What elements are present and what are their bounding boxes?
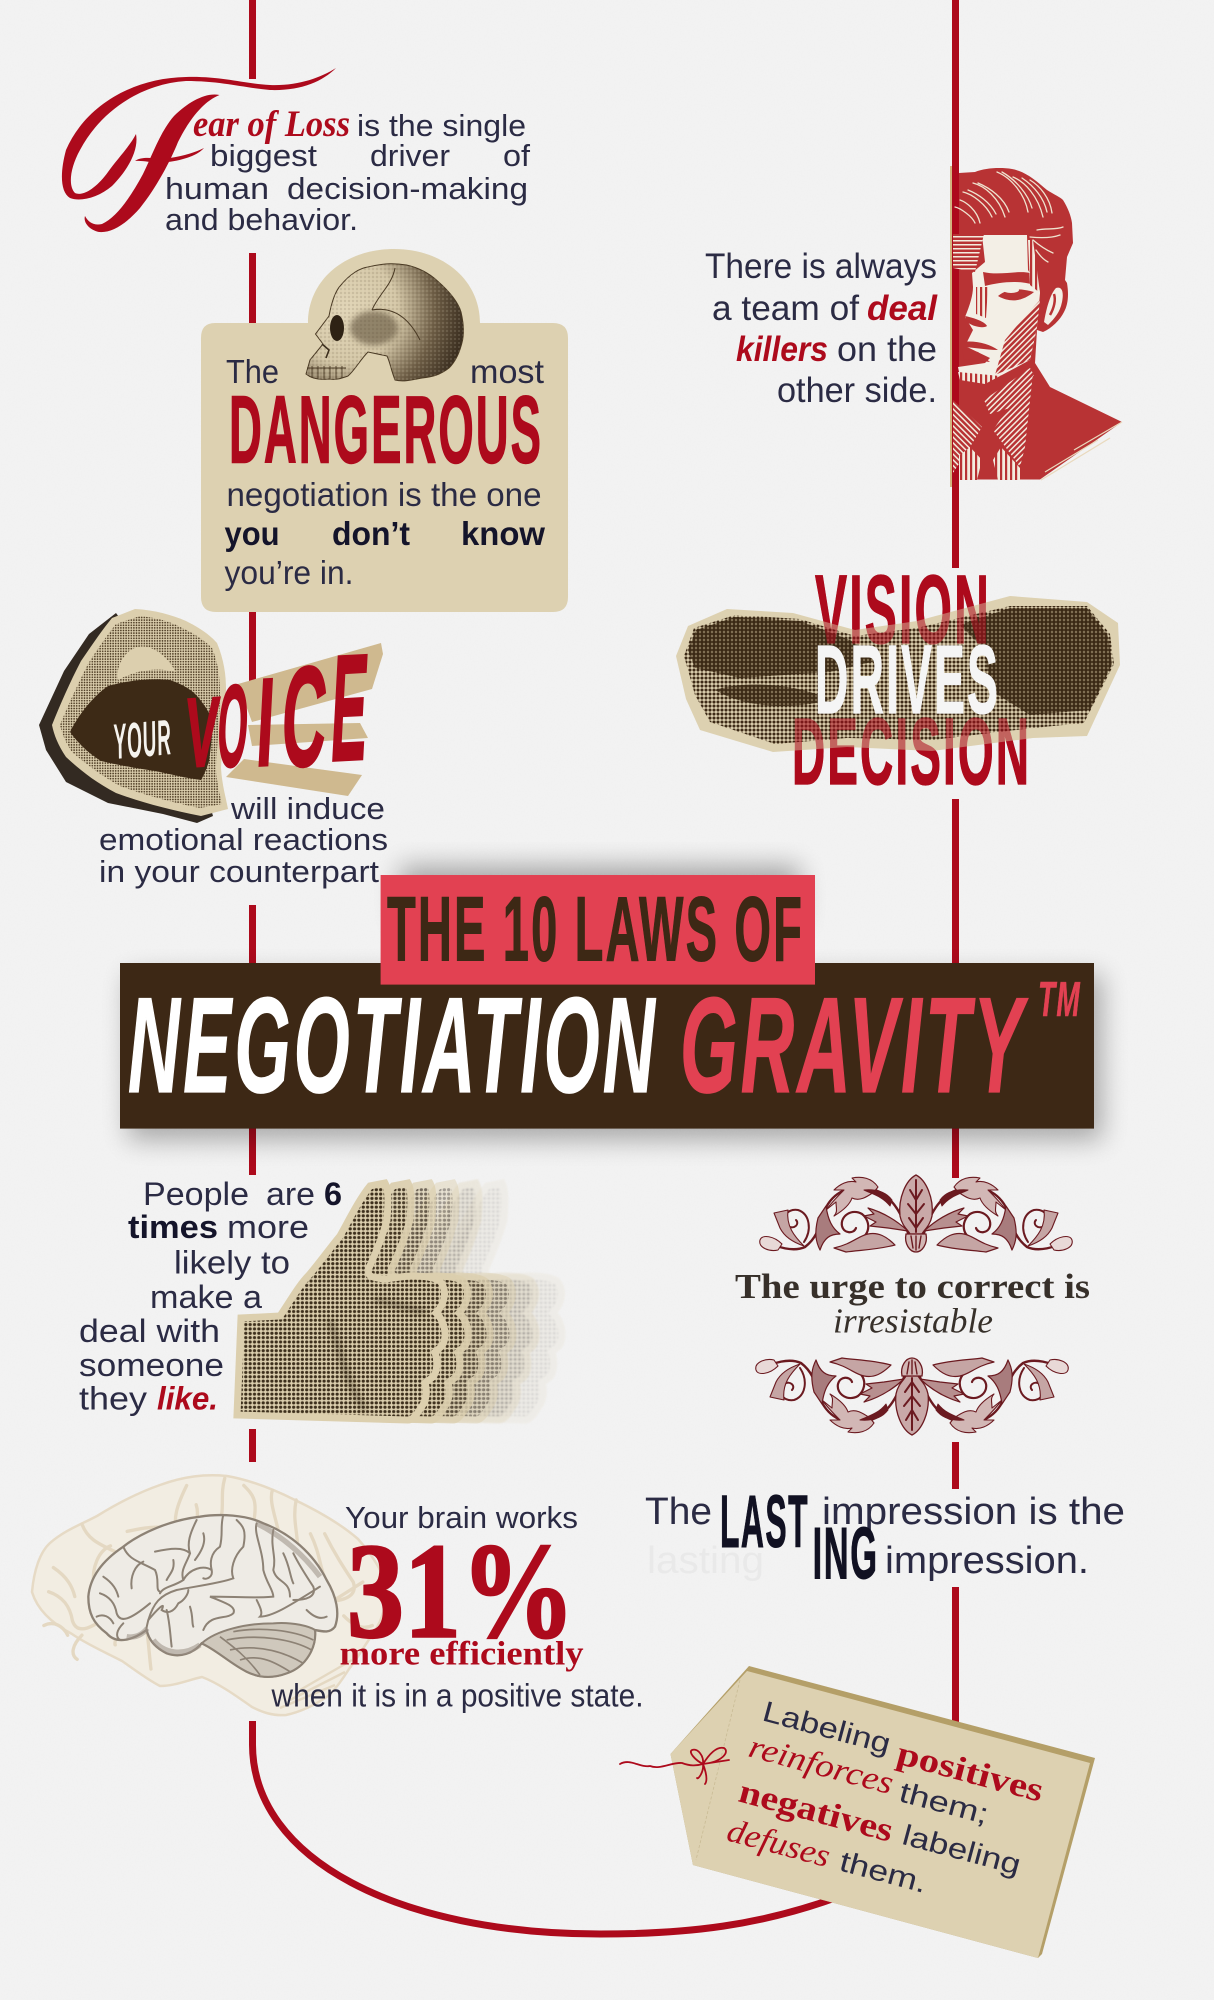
law: people like (79, 1176, 562, 1420)
law: positive brain (32, 1475, 644, 1715)
body text: is the single (357, 108, 526, 143)
ornament: top (760, 1175, 1072, 1252)
neck hatch (984, 368, 1034, 414)
body text (165, 108, 530, 237)
jacket edge lines (1041, 422, 1122, 480)
headline faded over paper: DRIVES (815, 625, 1000, 734)
text: more efficiently: more efficiently (340, 1635, 584, 1672)
banner: red panel (381, 875, 815, 985)
body text (224, 476, 545, 591)
panel: dangerous negotiation card: DANGEROUS (229, 377, 543, 484)
heading text (226, 353, 544, 484)
headline faded over paper (792, 555, 1031, 805)
law: vision drives decision (676, 555, 1120, 805)
text block: reinforces (745, 1729, 897, 1802)
body text: emotional reactions (99, 822, 388, 857)
law: labeling tag (620, 1666, 1095, 1958)
body text: biggest (210, 138, 317, 173)
text block: defuses (723, 1813, 834, 1875)
text block: on the (837, 330, 937, 369)
body text: 6 (324, 1176, 342, 1212)
banner: dark panel (120, 963, 1094, 1129)
text block: negatives (735, 1773, 897, 1850)
body text: in your counterpart (99, 854, 379, 889)
body text: likely to (174, 1245, 290, 1281)
law: deal killers (705, 166, 1122, 487)
title banner (120, 866, 1102, 1140)
text block (705, 247, 938, 410)
law: lasting impression (645, 1480, 1125, 1595)
headline: voice (183, 623, 372, 798)
nose and cheek shading (976, 287, 988, 318)
ear (1044, 288, 1063, 325)
icon: halftone thumbs up with motion echoes (237, 1183, 562, 1420)
icon: masking tape strips (226, 643, 383, 796)
heading text: The (226, 353, 279, 390)
icon: engraved small brain (88, 1515, 337, 1677)
body text (79, 1176, 342, 1416)
law: your voice: E (327, 623, 372, 794)
text block (723, 1696, 1047, 1900)
text block: LAST (720, 1480, 809, 1563)
text block: a team of (712, 289, 859, 328)
heading text: most (470, 353, 544, 390)
panel: dangerous negotiation card (201, 249, 568, 612)
body text: know (461, 515, 545, 552)
icon: pale large brain (32, 1475, 387, 1715)
text block: ING (813, 1514, 879, 1595)
text block: positives (893, 1735, 1047, 1810)
phrase: ear of Loss: ear of Loss (193, 104, 350, 145)
brow and eye (983, 272, 1034, 286)
tag shape (670, 1666, 1095, 1958)
text block: them; (896, 1777, 992, 1831)
text block: The urge to correct is (735, 1267, 1090, 1306)
text: positive state: when it is in a positive state. (271, 1678, 644, 1714)
collars (953, 400, 982, 473)
body text: are (266, 1176, 315, 1212)
icon: skull (306, 264, 464, 381)
icon: red string bow (620, 1748, 729, 1784)
body text: like. (157, 1380, 218, 1416)
law: your voice: YOUR (111, 709, 174, 770)
headline faded over paper: VISION (815, 555, 991, 664)
law: fear of loss (62, 68, 530, 237)
headline: voice: C (278, 637, 331, 798)
body text: human (165, 171, 269, 206)
body text: you’re in. (224, 554, 354, 591)
body text: you (224, 515, 280, 552)
text block: labeling (899, 1819, 1024, 1882)
headline red under paper (792, 555, 1031, 805)
ghost word: lasting: lasting (647, 1540, 764, 1582)
shirt (959, 447, 982, 480)
body text: People (143, 1176, 249, 1212)
text block (645, 1480, 1125, 1595)
stat: 31 percent: 31% (347, 1516, 575, 1666)
body text: times (128, 1209, 218, 1245)
text block: irresistable (833, 1302, 993, 1341)
text block: other side. (777, 371, 937, 410)
text block: them. (836, 1846, 930, 1900)
headline red under paper: VISION (815, 555, 991, 664)
title line 1: THE 10 LAWS OF (387, 879, 804, 981)
forehead hatch (953, 234, 984, 272)
text block: deal (867, 289, 938, 328)
body text: deal with (79, 1313, 220, 1349)
timeline: red gravity line (249, 0, 959, 1934)
headline: voice: V (183, 676, 222, 788)
text block (735, 1267, 1090, 1341)
icon: halftone open mouth (39, 609, 228, 823)
text block: impression is the (822, 1491, 1125, 1533)
title line 2: TM (1038, 973, 1081, 1027)
mouth (962, 341, 998, 350)
body text: they (79, 1380, 147, 1416)
icon: torn halftone eyes paper (676, 596, 1120, 752)
face light areas (958, 235, 1040, 383)
text block: The (645, 1491, 712, 1533)
body text: driver (370, 138, 450, 173)
law: your voice (39, 609, 388, 889)
headline: voice: O (215, 660, 251, 792)
icon: swash capital F (62, 68, 336, 232)
text: your brain works: Your brain works (345, 1500, 578, 1535)
card shape with arch (201, 249, 568, 612)
text block: There is always (705, 247, 937, 286)
banner shadows (128, 866, 1102, 1140)
law: urge to correct (735, 1175, 1090, 1435)
body text (99, 791, 388, 889)
body text: more (227, 1209, 309, 1245)
text block: impression. (885, 1540, 1089, 1582)
body text: and behavior. (165, 202, 358, 237)
icon: engraved man portrait (950, 166, 1122, 487)
body text: don’t (332, 515, 410, 552)
text block: killers (736, 330, 828, 369)
body text: someone (79, 1347, 224, 1383)
body text: make a (150, 1279, 262, 1315)
headline: voice: I (254, 652, 278, 793)
hair highlights (955, 172, 1063, 262)
title line 2: NEGOTIATION (128, 969, 658, 1121)
body text: decision-making (287, 171, 528, 206)
body text: of (503, 138, 530, 173)
ornament: bottom (756, 1358, 1068, 1435)
text block: Labeling (759, 1696, 894, 1761)
body text: will induce (230, 791, 385, 826)
body text: negotiation is the one (226, 476, 542, 513)
